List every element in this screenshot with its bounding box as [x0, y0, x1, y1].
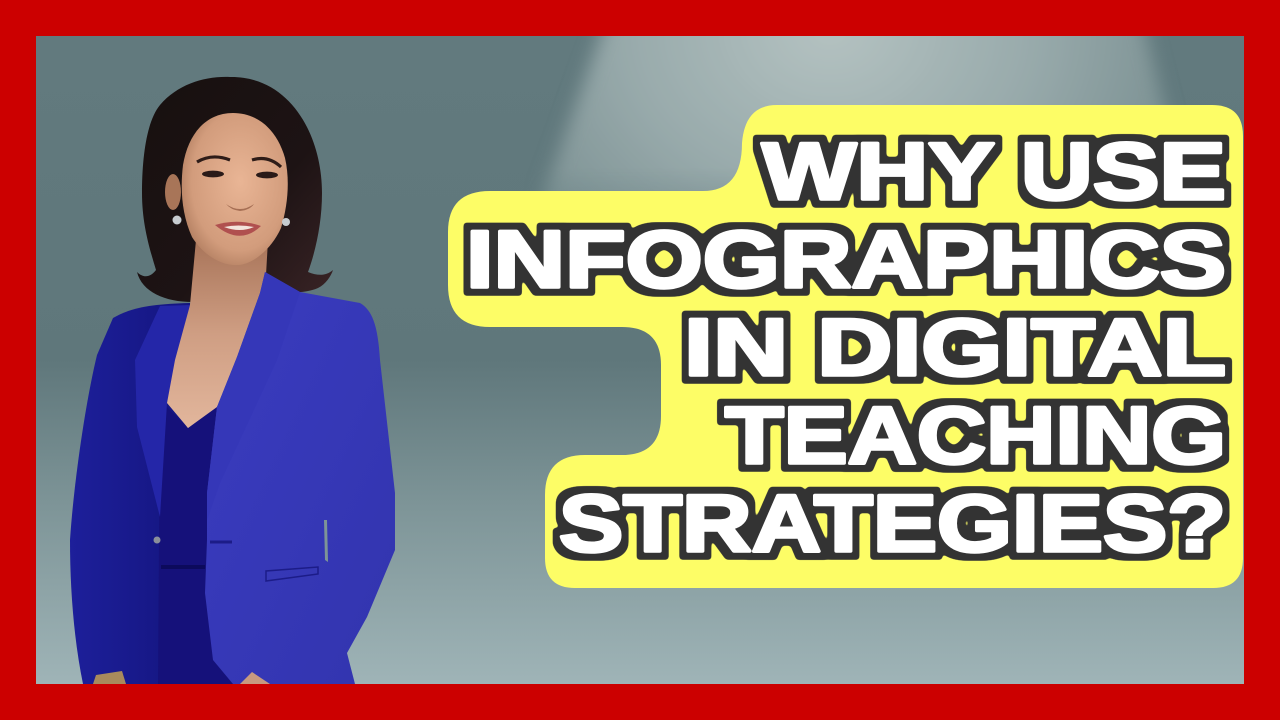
spotlight — [542, 36, 1169, 191]
title: STRATEGIES? — [559, 479, 1226, 569]
eyes — [202, 171, 278, 178]
waist seam — [161, 565, 205, 569]
title: WHY USE — [762, 127, 1226, 217]
jacket pockets — [210, 542, 318, 581]
earrings — [172, 216, 290, 226]
left lapel — [135, 305, 190, 517]
yellow title panel — [448, 105, 1243, 588]
title: IN DIGITAL — [684, 303, 1226, 393]
right jacket panel — [205, 272, 395, 684]
eyebrows — [197, 157, 281, 167]
face — [182, 113, 288, 265]
smile — [215, 222, 261, 236]
arm gap — [324, 520, 328, 562]
title — [466, 127, 1226, 569]
red frame top edge — [0, 0, 1280, 36]
ear — [165, 174, 181, 210]
title: INFOGRAPHICS — [466, 215, 1226, 305]
nose shadow — [226, 204, 254, 211]
button — [154, 536, 160, 544]
hair — [137, 77, 333, 302]
inner top — [158, 400, 240, 684]
presenter portrait — [70, 77, 395, 684]
hand — [240, 672, 270, 684]
watch — [93, 671, 126, 684]
left arm and jacket side — [70, 303, 190, 684]
neck and chest — [167, 240, 268, 428]
right lapel — [207, 272, 300, 520]
title: TEACHING — [725, 391, 1226, 481]
